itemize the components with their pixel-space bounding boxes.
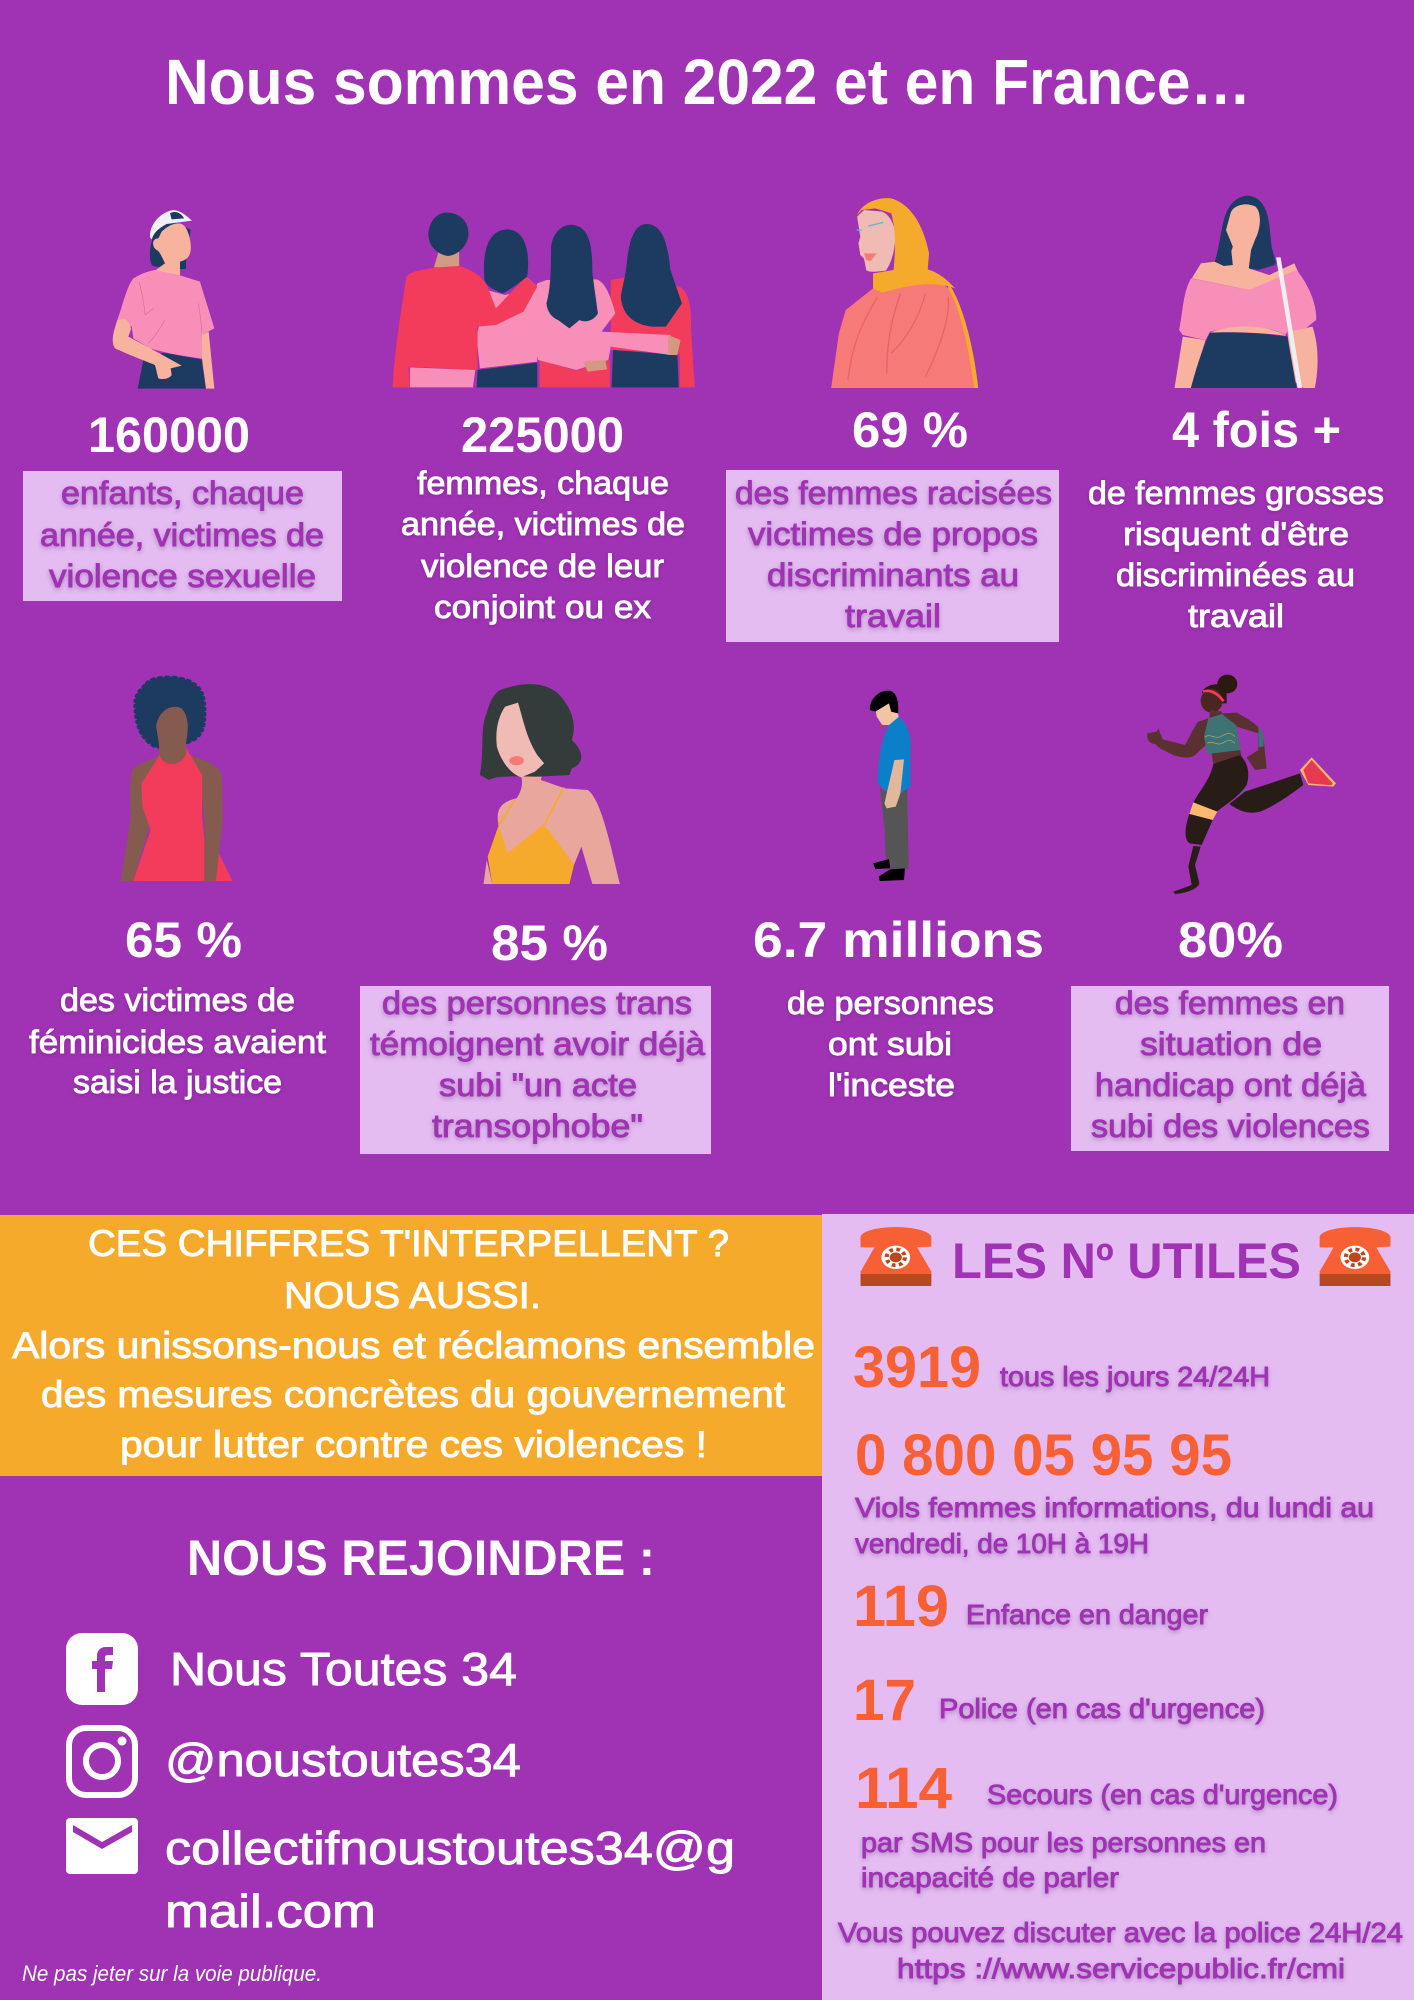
stat: 6.7 millions <box>753 691 1044 1103</box>
banner text: Alors unissons-nous et réclamons ensemble <box>12 1325 815 1366</box>
banner text: pour lutter contre ces violences ! <box>120 1424 707 1465</box>
number: 160000 <box>88 407 250 463</box>
label box <box>726 470 1059 642</box>
facebook name: Nous Toutes 34 <box>170 1643 517 1695</box>
description: discriminants au <box>767 557 1019 593</box>
label box <box>23 471 342 601</box>
text: viols femmes informations <box>855 1492 1374 1559</box>
banner background <box>0 1215 822 1476</box>
description: des personnes trans <box>382 985 692 1021</box>
description <box>401 465 685 625</box>
icon: telephone right <box>1320 1227 1390 1286</box>
text: par SMS: par SMS pour les personnes en <box>861 1827 1266 1858</box>
stat: 225000 femmes <box>393 213 695 625</box>
description: de femmes grosses <box>1088 475 1384 511</box>
number: 69 % <box>852 402 968 458</box>
description <box>735 475 1052 634</box>
description <box>370 985 705 1144</box>
banner text <box>12 1223 815 1465</box>
description: handicap ont déjà <box>1095 1067 1366 1103</box>
description: l'inceste <box>828 1067 955 1103</box>
description: violence de leur <box>421 548 664 584</box>
description: risquent d'être <box>1123 516 1349 552</box>
icon: mail <box>66 1818 138 1874</box>
description: année, victimes de <box>40 517 324 553</box>
description: situation de <box>1140 1026 1322 1062</box>
description: conjoint ou ex <box>434 589 651 625</box>
panel: call to action <box>0 1215 822 1476</box>
description: transophobe" <box>432 1108 643 1144</box>
panel: join us <box>66 1530 735 1937</box>
text: par SMS <box>861 1827 1266 1893</box>
illustration: group of four women <box>393 213 695 387</box>
description <box>1091 985 1370 1144</box>
description: victimes de propos <box>748 516 1038 552</box>
banner text: CES CHIFFRES T'INTERPELLENT ? <box>88 1223 729 1264</box>
banner text: NOUS AUSSI. <box>284 1275 541 1316</box>
description <box>40 475 324 594</box>
footer note: Ne pas jeter sur la voie publique. <box>22 1961 322 1986</box>
stat: 69 % <box>726 198 1059 642</box>
number: 3919: 3919 <box>853 1335 981 1400</box>
description: des femmes en <box>1115 985 1345 1021</box>
description: des victimes de <box>60 982 295 1018</box>
description: subi "un acte <box>439 1067 637 1103</box>
icon: facebook <box>66 1633 138 1705</box>
heading: NOUS REJOINDRE : <box>187 1530 655 1586</box>
text: secours: Secours (en cas d'urgence) <box>987 1779 1338 1810</box>
banner text: des mesures concrètes du gouvernement <box>41 1374 786 1415</box>
email address: collectifnoustoutes34@g <box>165 1822 735 1874</box>
stat: 85 % <box>360 684 711 1154</box>
illustration: man looking down <box>870 691 911 881</box>
number: 119: 119 <box>853 1574 949 1639</box>
number: 65 % <box>125 912 242 968</box>
text: viols femmes informations: Viols femmes informations, du lundi au <box>855 1492 1374 1523</box>
email address <box>165 1822 735 1937</box>
text: par SMS: incapacité de parler <box>861 1862 1119 1893</box>
instagram handle: @noustoutes34 <box>165 1734 521 1786</box>
number: 114: 114 <box>855 1756 952 1821</box>
number: 6.7 millions <box>753 912 1044 968</box>
description: subi des violences <box>1091 1108 1370 1144</box>
description: de personnes <box>787 985 994 1021</box>
description <box>1088 475 1384 634</box>
stat: 4 fois + <box>1088 196 1384 634</box>
heading: LES Nº UTILES <box>952 1233 1301 1289</box>
icon: telephone left <box>861 1227 931 1286</box>
number: 85 % <box>491 915 608 971</box>
number: 4 fois + <box>1172 402 1341 458</box>
illustration: woman in yellow top <box>480 684 620 884</box>
stat: 160000 enfants <box>23 210 342 601</box>
panel: useful numbers <box>822 1214 1414 2000</box>
description: travail <box>1188 598 1284 634</box>
illustration: woman with headscarf <box>831 198 978 388</box>
text: viols femmes informations: vendredi, de 10H à 19H <box>855 1528 1149 1559</box>
description: année, victimes de <box>401 506 685 542</box>
number: 0 800 05 95 95: 0 800 05 95 95 <box>855 1423 1232 1488</box>
label box <box>1071 986 1389 1151</box>
text: enfance en danger: Enfance en danger <box>966 1599 1208 1630</box>
description: féminicides avaient <box>29 1024 326 1060</box>
text: 3919 detail: tous les jours 24/24H <box>1000 1361 1270 1392</box>
description: discriminées au <box>1116 557 1355 593</box>
description: ont subi <box>828 1026 952 1062</box>
number: 80% <box>1178 912 1283 968</box>
title: Nous sommes en 2022 et en France… <box>165 46 1251 118</box>
icon: instagram <box>69 1728 135 1795</box>
illustration: runner with prosthetic leg <box>1147 675 1336 894</box>
stat: 65 % <box>29 677 326 1100</box>
text: police: Police (en cas d'urgence) <box>939 1693 1265 1724</box>
description: violence sexuelle <box>49 558 316 594</box>
text: police online <box>838 1917 1403 1984</box>
email address: mail.com <box>165 1885 376 1937</box>
panel background <box>822 1214 1414 2000</box>
illustration: woman in red dress <box>121 677 232 881</box>
text: police online: Vous pouvez discuter avec la police 24H/24 <box>838 1917 1403 1948</box>
illustration: person with cap <box>113 210 214 389</box>
description: témoignent avoir déjà <box>370 1026 705 1062</box>
description <box>29 982 326 1100</box>
description: saisi la justice <box>73 1064 282 1100</box>
number: 225000 <box>461 407 624 463</box>
stat: 80% <box>1071 675 1389 1151</box>
description <box>787 985 994 1103</box>
description: enfants, chaque <box>61 475 304 511</box>
label box <box>360 986 711 1154</box>
description: des femmes racisées <box>735 475 1052 511</box>
description: femmes, chaque <box>417 465 669 501</box>
illustration: woman in pink top <box>1175 196 1318 388</box>
description: travail <box>845 598 941 634</box>
number: 17: 17 <box>853 1668 916 1733</box>
text: police online: https ://www.servicepublic.fr/cmi <box>897 1953 1345 1984</box>
